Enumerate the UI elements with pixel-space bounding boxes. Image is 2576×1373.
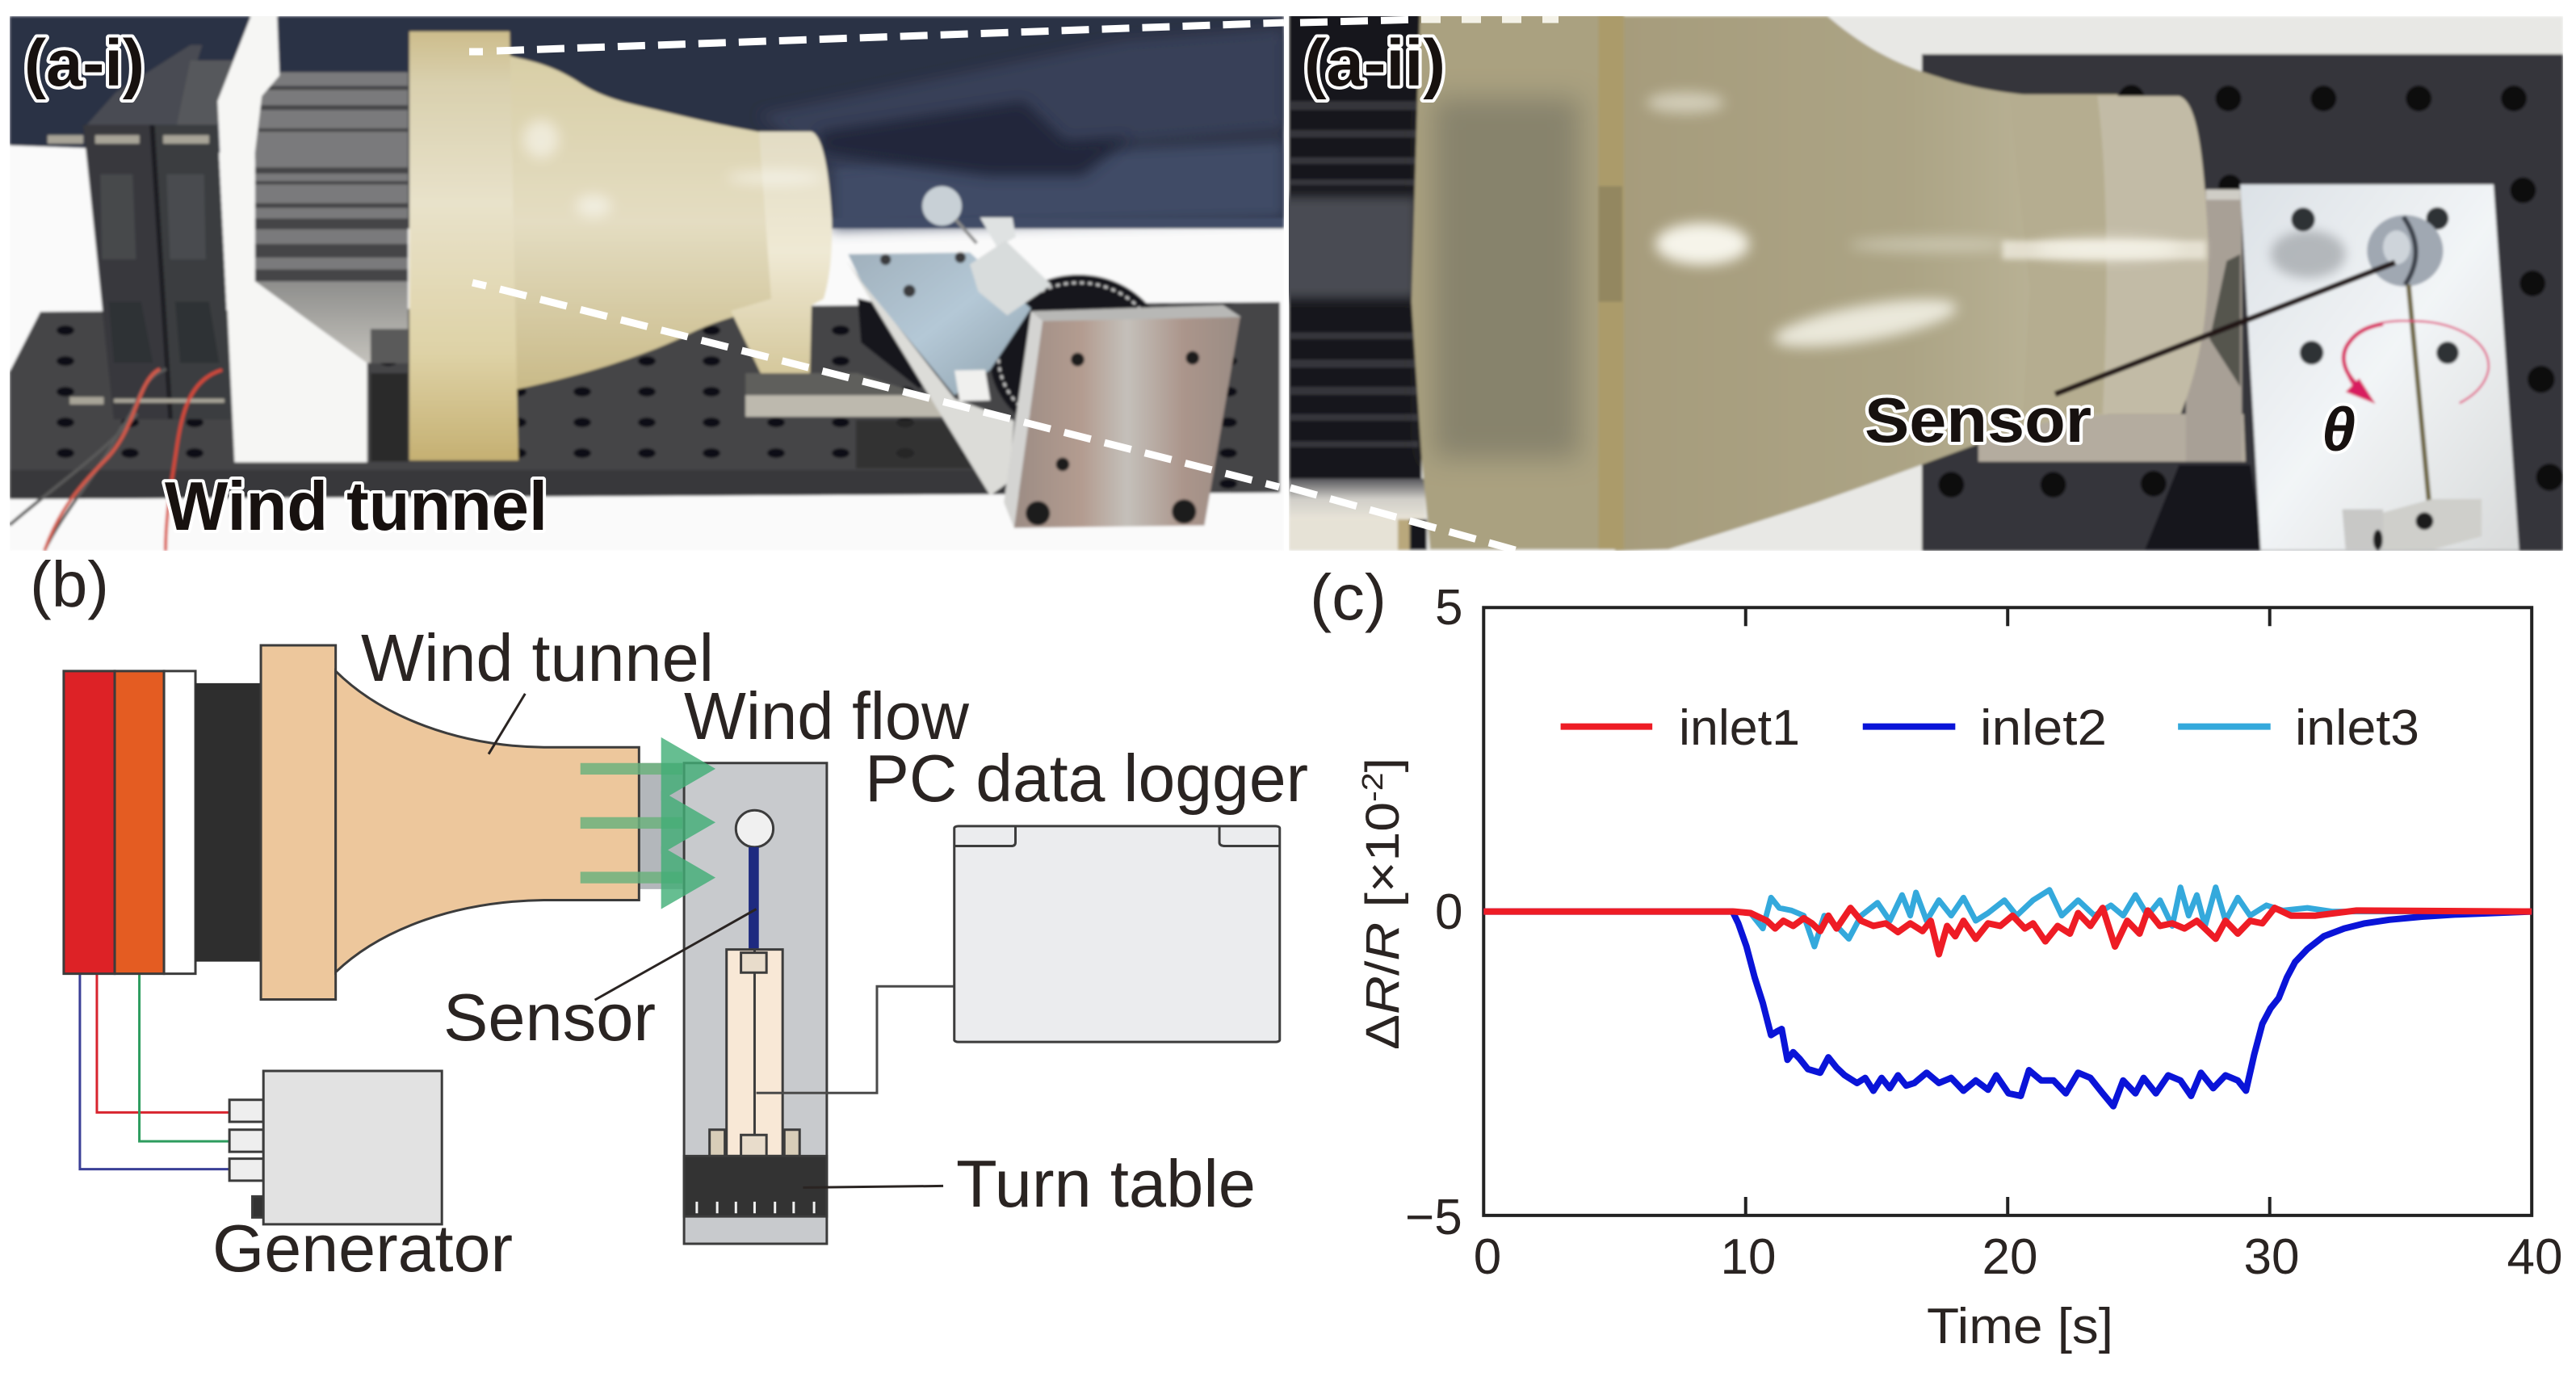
x tick labels bbox=[1474, 1229, 2562, 1285]
lower-left bench bbox=[1289, 479, 1427, 550]
inlet3 series bbox=[1483, 888, 2532, 947]
tunnel inlet flange bbox=[261, 645, 336, 999]
label: wind tunnel: Wind tunnel bbox=[165, 468, 548, 545]
block holes bbox=[1026, 351, 1199, 526]
optical table bbox=[10, 302, 1280, 499]
data logger wire bbox=[757, 986, 954, 1093]
y axis label: ΔR/R [×10 bbox=[1357, 817, 1409, 1050]
body highlights bbox=[1647, 92, 2180, 357]
block top edge bbox=[1031, 305, 1241, 321]
dark cloth backdrop bbox=[10, 16, 1284, 229]
plate knob bbox=[954, 370, 990, 401]
y tick labels: 5 bbox=[1435, 580, 1462, 636]
gray area under outlet bbox=[745, 373, 929, 397]
dashed zoom guides bbox=[469, 23, 1284, 487]
legend text inlet2: inlet2 bbox=[1980, 700, 2107, 756]
x tick labels: 30 bbox=[2244, 1229, 2299, 1285]
panel: c response chart bbox=[1310, 561, 2562, 1354]
rear turntable bbox=[856, 297, 922, 389]
perforated optical board bbox=[1922, 54, 2563, 551]
sensor disc and rod bbox=[922, 186, 976, 243]
label: PC data logger: PC data logger bbox=[865, 741, 1308, 816]
x tick labels: 0 bbox=[1474, 1229, 1501, 1285]
x tick labels: 10 bbox=[1721, 1229, 1776, 1285]
inlet1 series bbox=[1483, 908, 2532, 955]
label: sensor: Sensor bbox=[443, 980, 656, 1055]
turntable dial bbox=[990, 273, 1150, 414]
acrylic fan guard bbox=[86, 45, 238, 125]
clamp bbox=[2342, 499, 2482, 550]
PC data logger bbox=[954, 826, 1280, 1042]
label: theta: θ bbox=[2322, 396, 2356, 464]
wind flow arrows bbox=[581, 737, 715, 909]
tunnel contraction bbox=[336, 671, 639, 972]
label: wind tunnel: Wind tunnel bbox=[361, 620, 714, 695]
inlet flange bbox=[409, 31, 518, 460]
leader: sensor bbox=[595, 909, 757, 1000]
bracket bbox=[1978, 190, 2246, 462]
sensor disc bbox=[736, 810, 774, 847]
panel label b: (b) bbox=[30, 548, 109, 620]
flange bbox=[1412, 15, 1624, 549]
legend line inlet2 bbox=[1863, 724, 1955, 730]
dark shaded table area bbox=[856, 420, 971, 468]
label: turn table: Turn table bbox=[956, 1146, 1256, 1221]
panel: b schematic of setup bbox=[30, 548, 1308, 1286]
turn table bbox=[684, 1156, 827, 1216]
contraction body bbox=[507, 55, 778, 389]
panel: a-i photo of wind tunnel side view bbox=[10, 15, 1284, 551]
label: a-i: (a-i) bbox=[24, 27, 145, 100]
white mounting plate bbox=[217, 15, 367, 462]
inlet2 series bbox=[1483, 912, 2532, 1106]
fan backing bbox=[149, 124, 200, 422]
y axis label: ] bbox=[1357, 758, 1409, 772]
label: wind flow: Wind flow bbox=[684, 678, 970, 754]
generator bbox=[229, 1071, 442, 1224]
outlet body bbox=[2097, 96, 2208, 414]
plate screws bbox=[2291, 208, 2459, 365]
y axis label: -2 bbox=[1356, 772, 1389, 802]
dark shadow below bracket bbox=[2145, 465, 2264, 549]
y tick labels: −5 bbox=[1405, 1190, 1462, 1245]
leader: turn table bbox=[803, 1186, 943, 1187]
y tick labels: 0 bbox=[1435, 884, 1462, 940]
rotation arrow bbox=[2343, 321, 2489, 404]
plate screws bbox=[880, 252, 966, 297]
plate shadow bbox=[2271, 230, 2346, 278]
x tick labels: 40 bbox=[2507, 1229, 2562, 1285]
sensor holder bbox=[970, 217, 1051, 315]
contraction body bbox=[1615, 16, 2108, 551]
left fan bbox=[83, 125, 168, 419]
honeycomb bbox=[255, 72, 408, 462]
label: sensor: Sensor bbox=[1865, 384, 2091, 456]
aluminum plate bbox=[2240, 184, 2519, 550]
sensor disc bbox=[2367, 215, 2444, 287]
legend text inlet3: inlet3 bbox=[2295, 700, 2419, 756]
legend line inlet1 bbox=[1561, 724, 1652, 730]
y tick labels bbox=[1405, 580, 1462, 1245]
honeycomb block bbox=[195, 683, 261, 962]
dashed zoom guides bbox=[1290, 19, 1559, 551]
leader: wind tunnel bbox=[489, 694, 525, 754]
legend text inlet1: inlet1 bbox=[1679, 700, 1800, 756]
sensor pointer bbox=[2055, 262, 2395, 394]
turntable base plate bbox=[684, 763, 827, 1244]
body highlights bbox=[523, 120, 824, 217]
panel: a-ii close-up photo bbox=[1270, 15, 2563, 551]
tunnel outlet interior bbox=[639, 763, 690, 889]
label: a-ii: (a-ii) bbox=[1304, 27, 1445, 100]
x tick labels: 20 bbox=[1982, 1229, 2037, 1285]
tilted plate side bbox=[847, 261, 1014, 496]
left part of outlet bbox=[2009, 94, 2118, 414]
legend line inlet3 bbox=[2178, 724, 2271, 730]
right fan bbox=[155, 125, 232, 419]
honeycomb section bbox=[1270, 15, 1422, 480]
table front edge bbox=[10, 470, 1009, 499]
fan bolts bbox=[48, 135, 224, 405]
wall background bbox=[1289, 16, 2563, 551]
board holes bbox=[1938, 85, 2563, 498]
outlet flange bbox=[731, 132, 832, 373]
fan unit bbox=[64, 671, 195, 974]
label: generator: Generator bbox=[212, 1211, 513, 1286]
aluminum block bbox=[1014, 317, 1240, 528]
fan wires bbox=[10, 369, 222, 551]
plot frame and ticks bbox=[1483, 607, 2532, 1216]
x axis label: Time [s] bbox=[1927, 1299, 2113, 1354]
aluminum block side bbox=[1004, 311, 1043, 528]
wires to generator bbox=[80, 974, 229, 1169]
mounting bar bbox=[745, 395, 944, 417]
sensor strip bbox=[2409, 285, 2429, 501]
tilted plate top bbox=[848, 253, 1031, 395]
photo background bbox=[10, 143, 1284, 551]
sensor strip bbox=[749, 847, 759, 950]
sensor mount bbox=[710, 950, 799, 1156]
outlet highlight band bbox=[2002, 241, 2206, 259]
panel label c: (c) bbox=[1310, 561, 1387, 633]
